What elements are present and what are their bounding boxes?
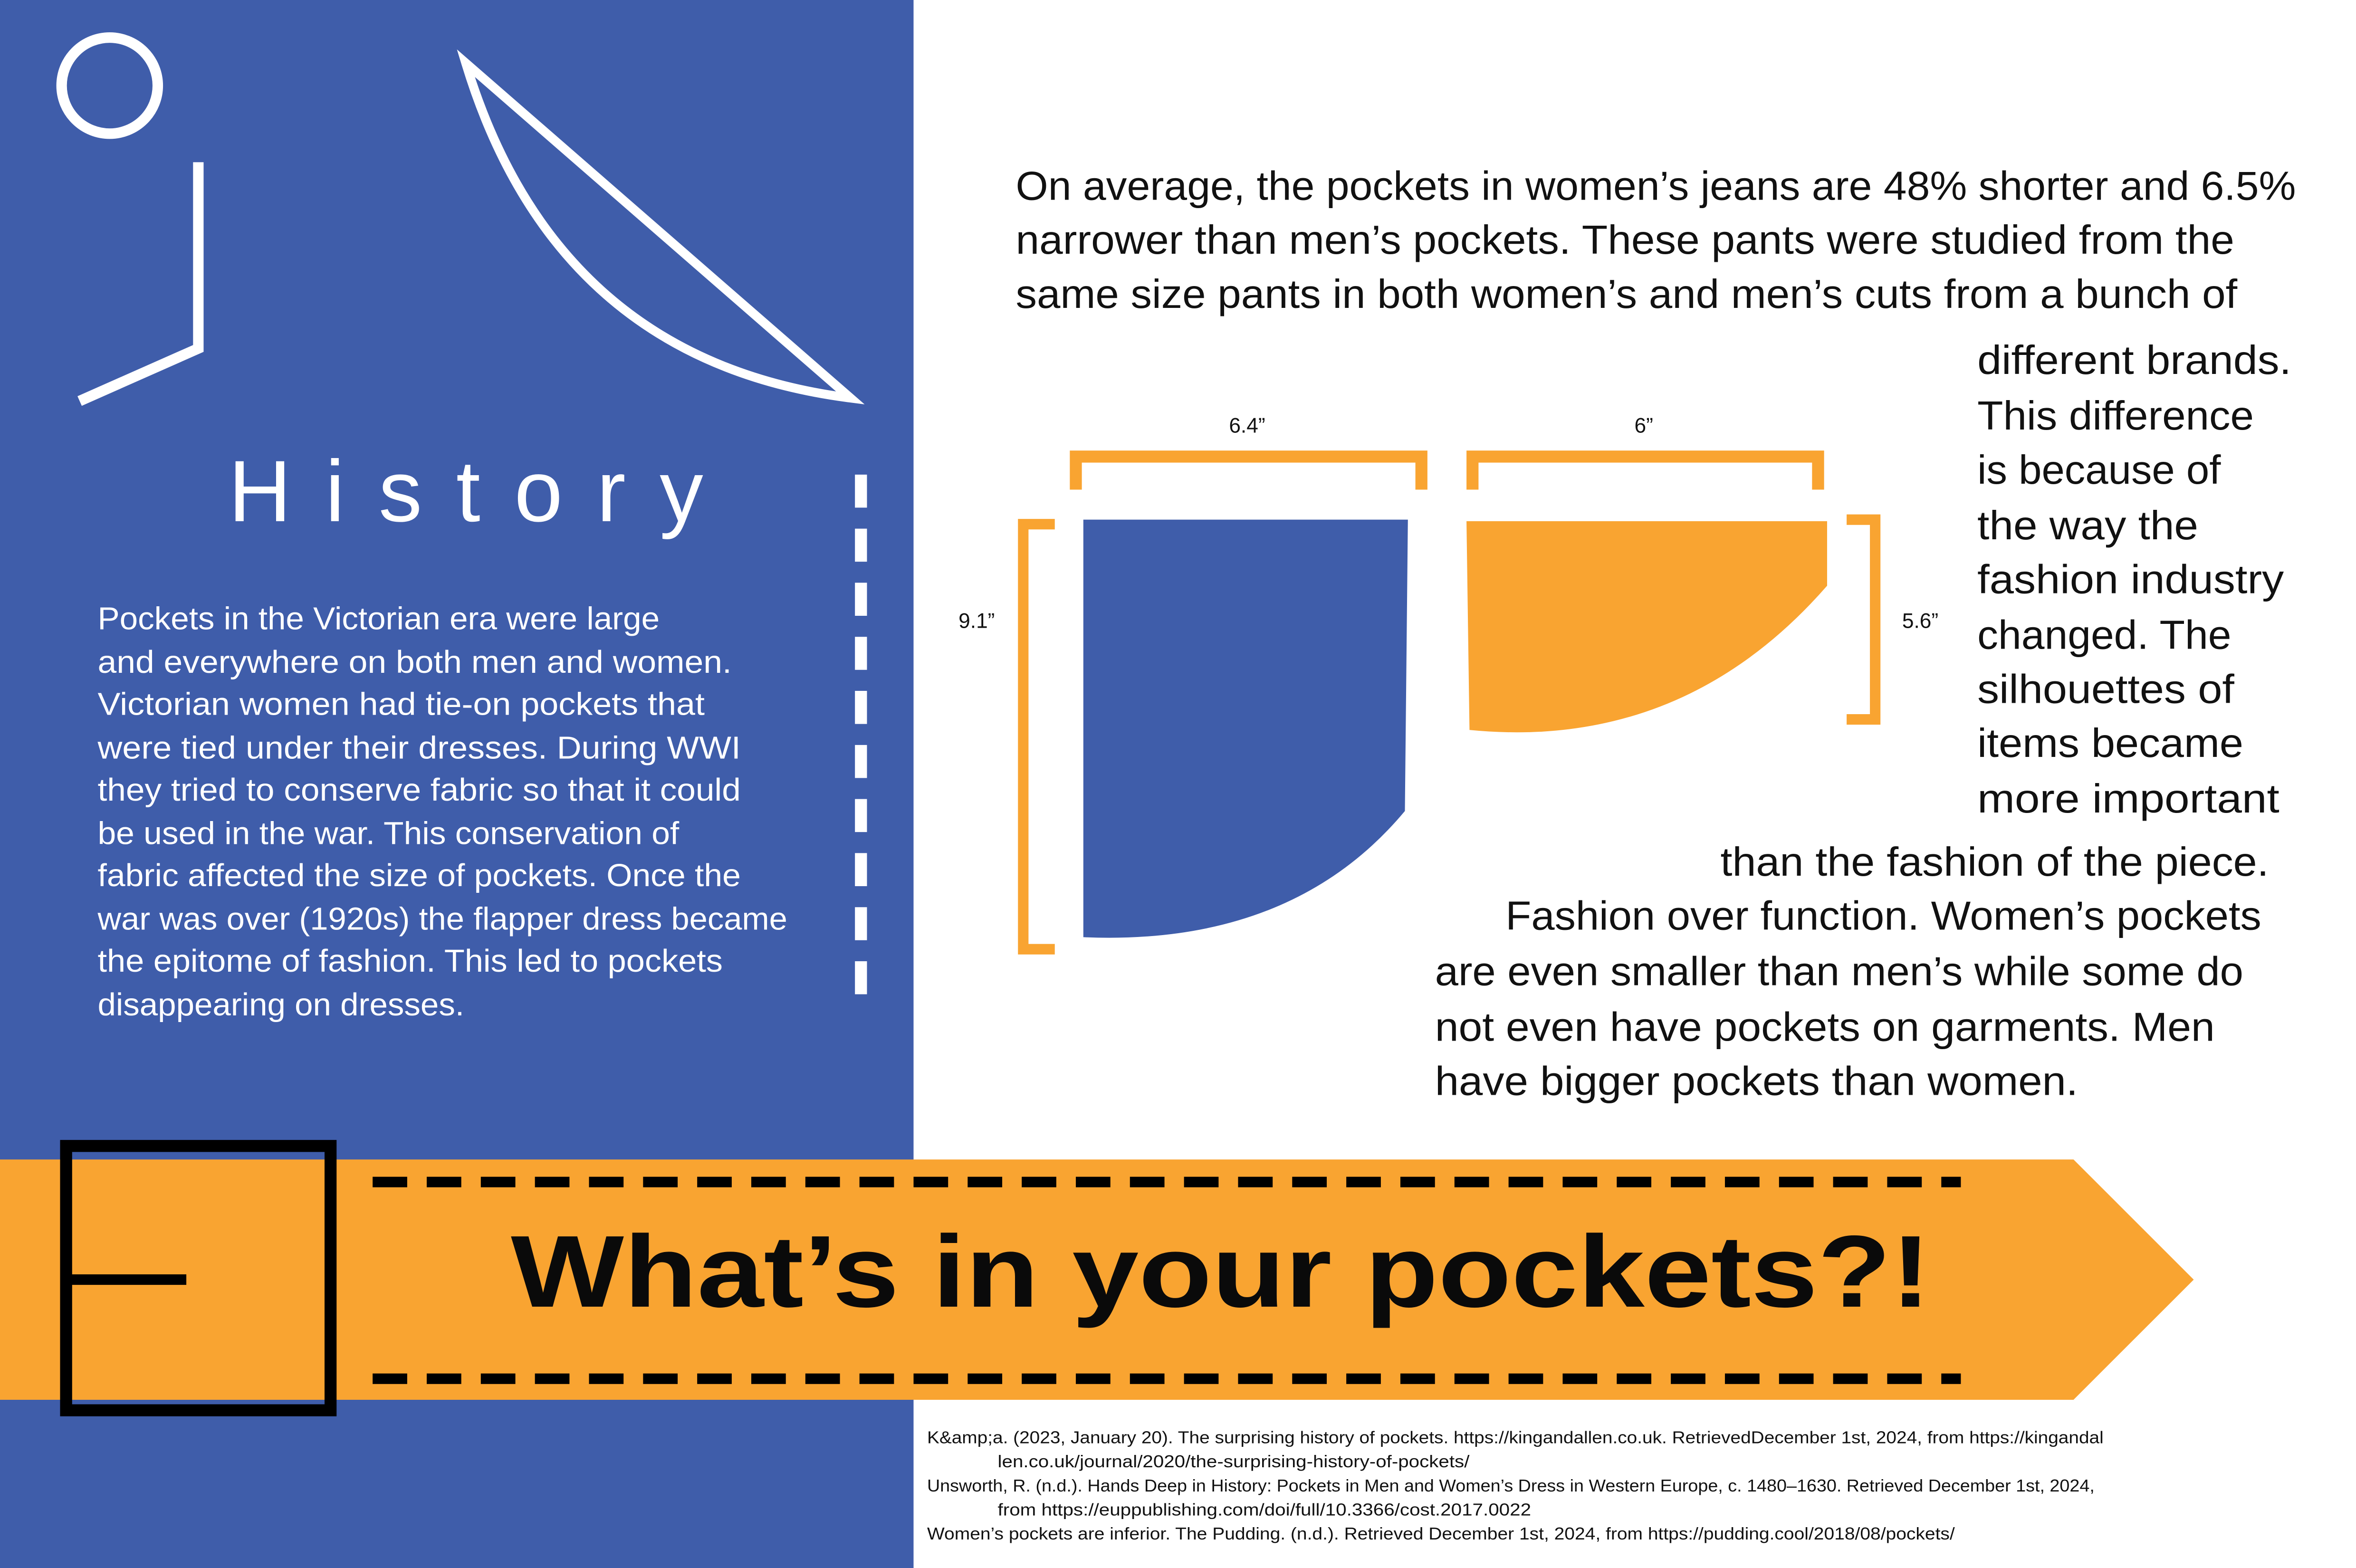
- bracket: height 9.1: [1023, 524, 1055, 949]
- text block: right column: fashion industry: [1977, 557, 2284, 602]
- label: 6: 6”: [1635, 414, 1653, 437]
- heading: History: History: [229, 442, 703, 540]
- text block: history paragraph: disappearing on dresses.: [98, 987, 464, 1023]
- icon: circle head: [62, 38, 158, 134]
- text block: top statistics: same size pants in both women’s and men’s cuts from a bunch of: [1016, 272, 2237, 317]
- text block: right column: silhouettes of: [1977, 667, 2234, 712]
- text block: top statistics: On average, the pockets in women’s jeans are 48% shorter and 6.5%: [1016, 163, 2296, 209]
- text block: references: K&amp;a. (2023, January 20). The surprising history of pockets. https://kingandallen.co.uk. RetrievedDecember 1st, 2024, from https://kingandal: [927, 1428, 2104, 1447]
- dashed stitch lines: [373, 1180, 1961, 1184]
- icon: leaf shape: [466, 63, 851, 398]
- text block: history paragraph: [97, 601, 787, 1023]
- text block: history paragraph: Pockets in the Victorian era were large: [98, 601, 660, 636]
- bracket: width 6: [1473, 457, 1818, 489]
- text block: history paragraph: they tried to conserve fabric so that it could: [98, 773, 741, 808]
- text block: history paragraph: were tied under their dresses. During WWI: [97, 730, 741, 765]
- text block: top statistics: [1016, 163, 2296, 317]
- text block: right column: Fashion over function. Women’s pockets: [1505, 894, 2261, 939]
- text block: right column: are even smaller than men’s while some do: [1435, 949, 2243, 994]
- icon: black square pocket: [66, 1146, 331, 1410]
- text block: right column: items became: [1977, 721, 2243, 766]
- banner: orange arrow: [0, 1159, 2194, 1400]
- text block: references: [927, 1428, 2104, 1543]
- bracket: width 6.4: [1076, 457, 1421, 489]
- text block: references: len.co.uk/journal/2020/the-surprising-history-of-pockets/: [998, 1452, 1470, 1471]
- text block: right column: changed. The: [1977, 613, 2231, 658]
- label: 5.6: 5.6”: [1902, 609, 1938, 632]
- text block: right column: the way the: [1977, 503, 2198, 548]
- text block: history paragraph: war was over (1920s) the flapper dress became: [97, 902, 787, 937]
- text block: right column: have bigger pockets than women.: [1435, 1059, 2078, 1104]
- text block: right column: than the fashion of the piece.: [1720, 840, 2269, 885]
- chart: men's pocket: [958, 414, 1421, 949]
- text block: history paragraph: be used in the war. This conservation of: [98, 816, 680, 851]
- text block: right column: more important: [1977, 776, 2279, 822]
- text block: right column: not even have pockets on garments. Men: [1435, 1005, 2215, 1050]
- text block: history paragraph: Victorian women had tie-on pockets that: [98, 687, 705, 722]
- icon: bent line: [80, 162, 198, 401]
- chart: women's pocket: [1466, 414, 1938, 732]
- text block: right column: is because of: [1977, 448, 2221, 493]
- text block: right column: [1435, 338, 2291, 1104]
- text block: history paragraph: the epitome of fashion. This led to pockets: [98, 944, 723, 979]
- text block: right column: This difference: [1977, 393, 2254, 439]
- label: 9.1: 9.1”: [958, 609, 995, 632]
- text block: right column: different brands.: [1977, 338, 2291, 383]
- panel: history background: [0, 0, 913, 1568]
- text block: history paragraph: and everywhere on both men and women.: [98, 645, 732, 680]
- title: What’s in your pockets?!: [511, 1214, 1931, 1329]
- text block: references: from https://euppublishing.com/doi/full/10.3366/cost.2017.0022: [998, 1500, 1531, 1519]
- text block: top statistics: narrower than men’s pockets. These pants were studied from the: [1016, 218, 2234, 263]
- dashed vertical line: [859, 475, 863, 1009]
- bracket: height 5.6: [1847, 520, 1875, 719]
- text block: references: Unsworth, R. (n.d.). Hands Deep in History: Pockets in Men and Women’s Dress in Western Europe, c. 1480–1630. Retrieved December 1st, 2024,: [927, 1476, 2095, 1495]
- text block: history paragraph: fabric affected the size of pockets. Once the: [98, 858, 741, 893]
- label: 6.4: 6.4”: [1229, 414, 1265, 437]
- text block: references: Women’s pockets are inferior. The Pudding. (n.d.). Retrieved December 1st, 2024, from https://pudding.cool/2018/08/pockets/: [927, 1524, 1955, 1543]
